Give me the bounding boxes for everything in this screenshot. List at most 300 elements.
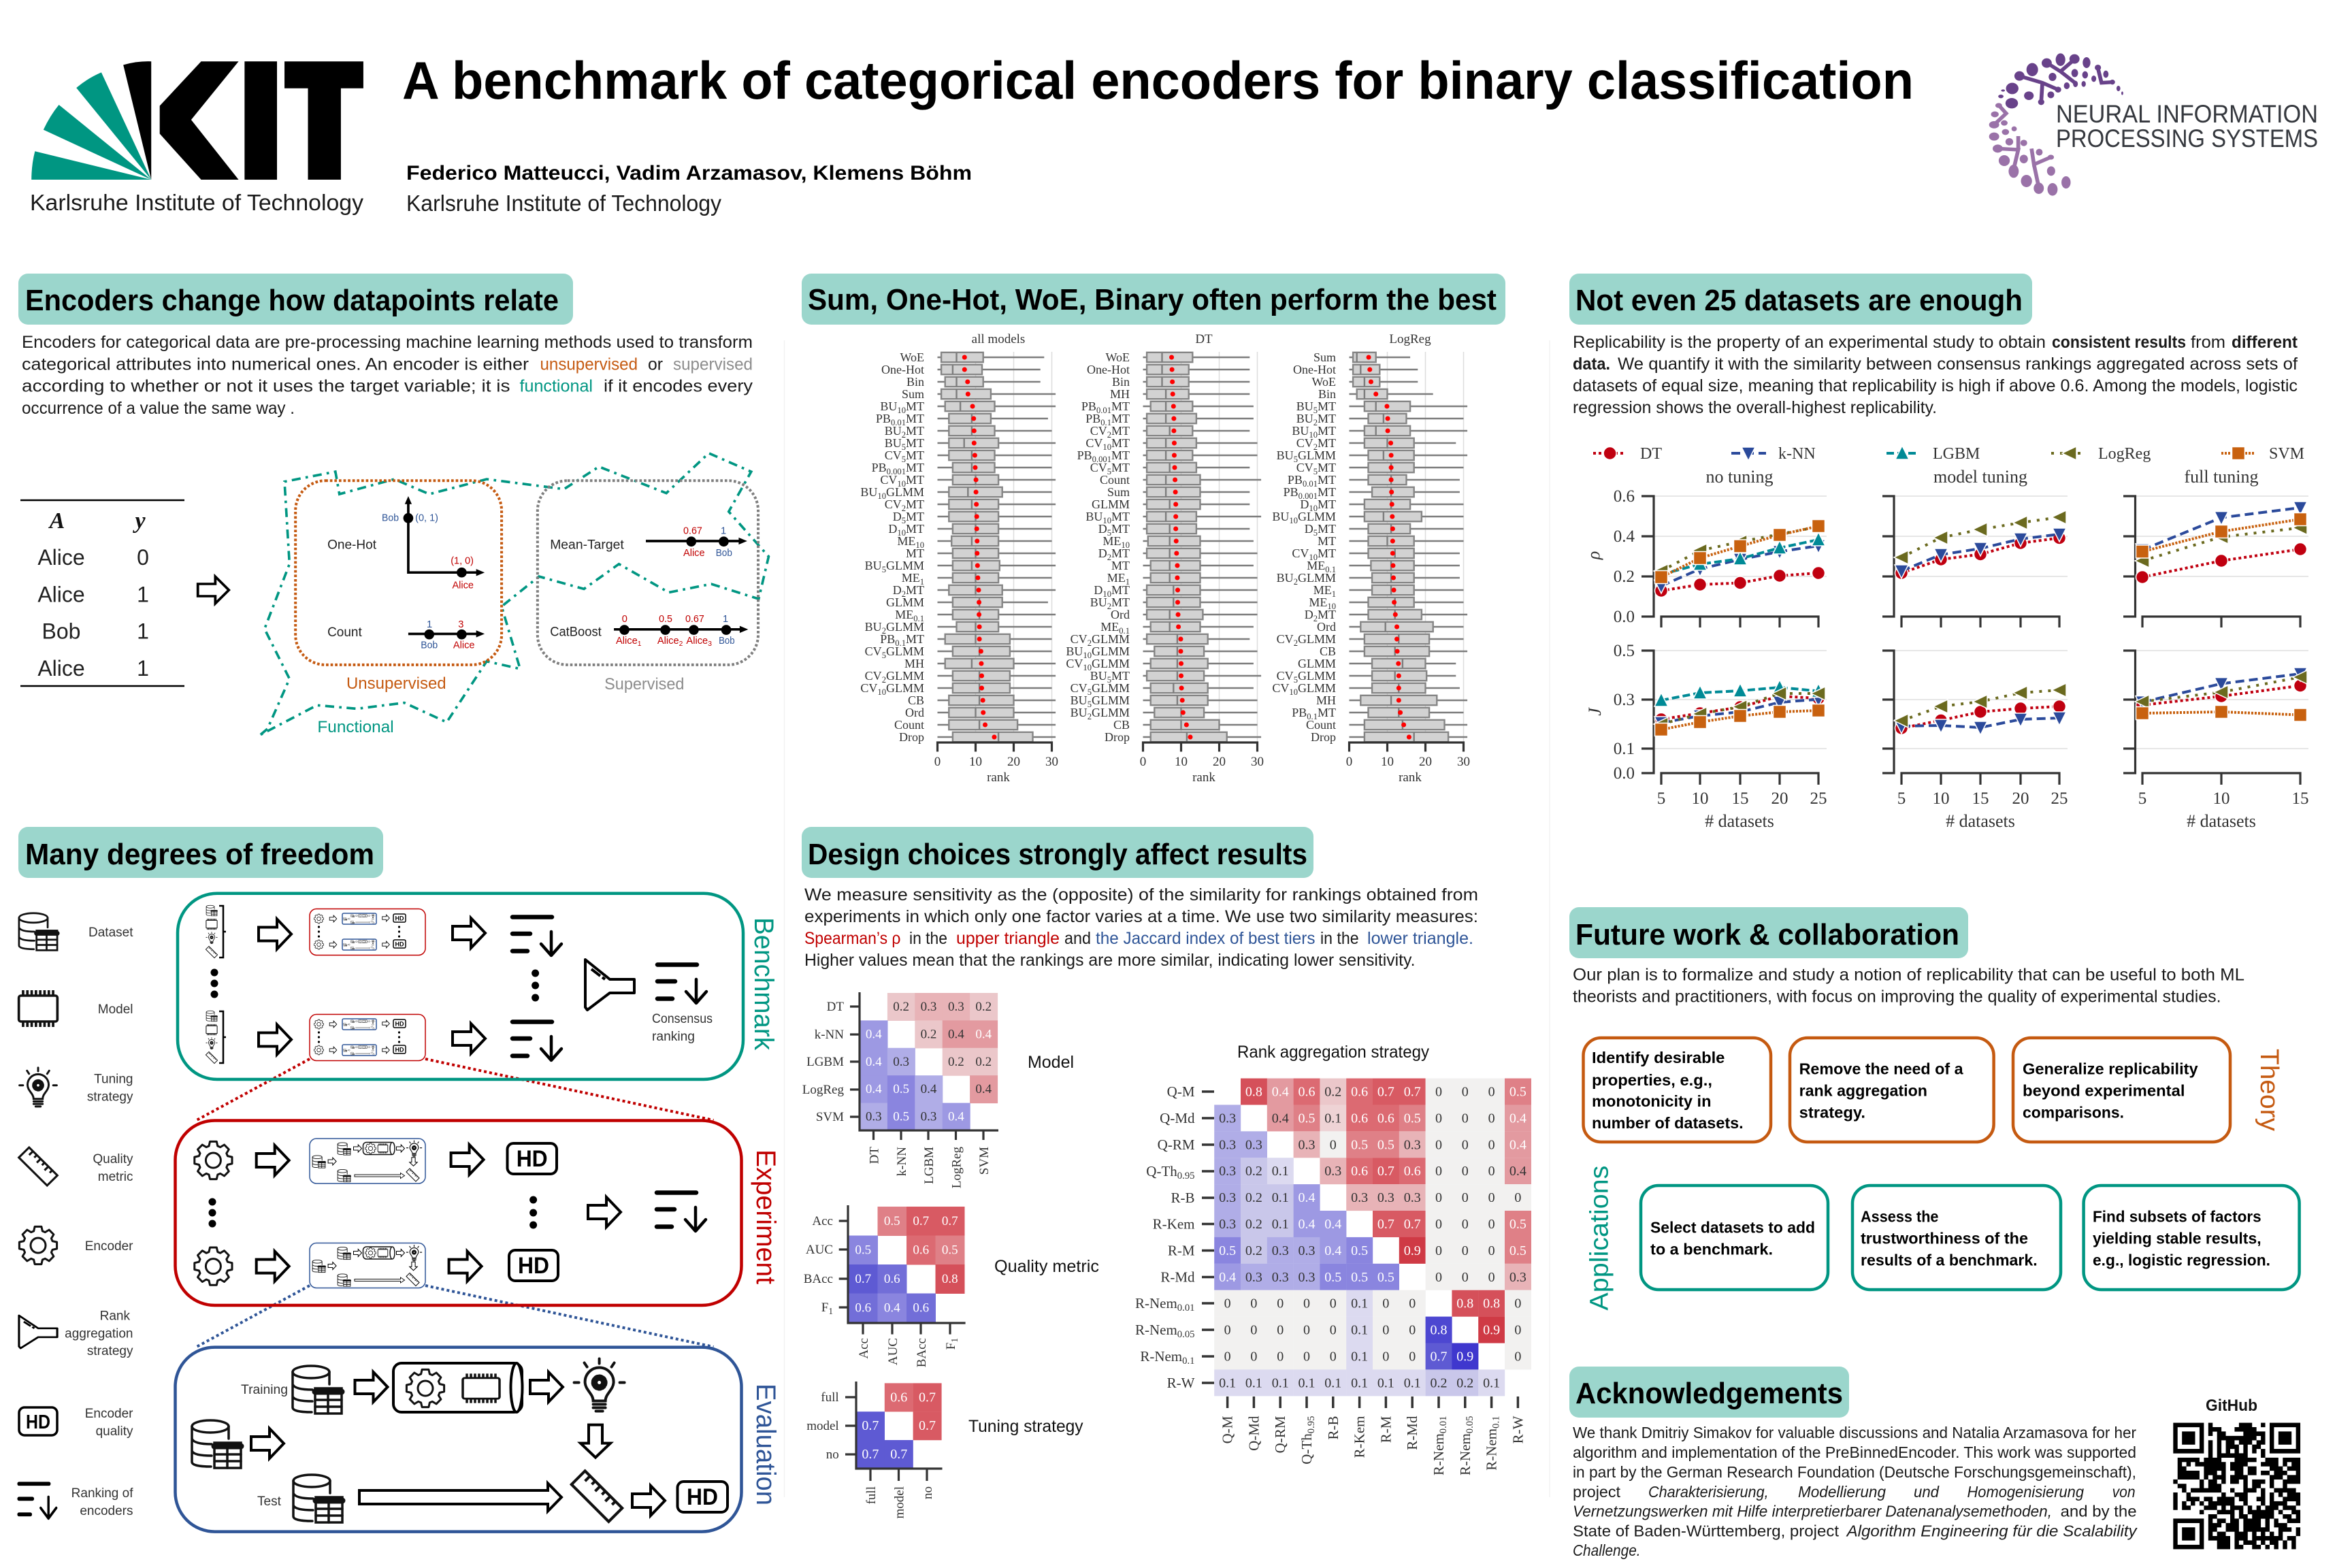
panel: evaluation	[176, 1348, 781, 1532]
line chart: model tuning, J	[1882, 651, 2068, 831]
box plot: LogReg: Ord	[1317, 620, 1336, 634]
box plot: DT: DT	[1195, 332, 1213, 346]
box plot: LogReg: Count	[1306, 718, 1336, 732]
legend: factors: metric	[98, 1170, 133, 1184]
heatmap: rank aggregation strategy: 0.3	[1298, 1243, 1315, 1258]
heatmap: rank aggregation strategy: 0	[1514, 1349, 1521, 1364]
heatmap: rank aggregation strategy: R-Nem0.1	[1140, 1348, 1195, 1367]
table: example data: Bob	[42, 619, 80, 644]
callout: stable subsets: yielding stable results,	[2093, 1230, 2261, 1247]
box plot: DT: BU5MT	[1090, 669, 1130, 685]
icon: quality metric	[19, 1147, 57, 1186]
callout: generalize replicability	[2013, 1038, 2230, 1142]
callout: trustworthiness: trustworthiness of the	[1861, 1230, 2028, 1247]
text block: acknowledgements: algorithm and implementation of the PreBinnedEncoder. This work was supported	[1573, 1443, 2136, 1461]
box plot: all models: ME0.1	[895, 608, 924, 623]
label: supervised: Supervised	[604, 675, 684, 693]
heatmap: quality metric: 0.6	[855, 1301, 871, 1315]
heatmap: rank aggregation strategy: 0	[1488, 1111, 1495, 1126]
heatmap: rank aggregation strategy: 0.5	[1377, 1137, 1394, 1152]
box plot: all models: PB0.01MT	[876, 412, 924, 427]
heatmap: rank aggregation strategy: 0.3	[1272, 1243, 1289, 1258]
arrows: to rankings	[453, 918, 485, 1054]
text block: acknowledgements	[1573, 1424, 2138, 1559]
box plot: DT: One-Hot	[1087, 363, 1130, 376]
box plot: LogReg: BU10GLMM	[1272, 510, 1336, 525]
text block: acknowledgements: and by the	[2061, 1503, 2137, 1520]
heatmap: rank aggregation strategy: 0	[1250, 1323, 1257, 1338]
icon: pipeline	[393, 1363, 523, 1412]
heatmap: rank aggregation strategy: Q-Th0.95	[1146, 1163, 1195, 1181]
label: benchmark: Benchmark	[749, 917, 779, 1051]
line chart: no tuning, rho: 0.0	[1614, 608, 1635, 626]
box plot: all models: 20	[1007, 755, 1020, 769]
heatmap: rank aggregation strategy: Q-RM	[1158, 1137, 1195, 1153]
affiliation: Karlsruhe Institute of Technology	[406, 191, 721, 216]
box plot: DT: MH	[1110, 387, 1130, 401]
heatmap: rank aggregation strategy: 0	[1277, 1296, 1284, 1311]
icon: consensus ranking	[657, 965, 706, 1003]
icons: rankings	[512, 917, 561, 1060]
heatmap: rank aggregation strategy: 0	[1462, 1270, 1469, 1285]
table: example data: 1	[137, 583, 149, 607]
box plot: LogReg: D5MT	[1305, 522, 1336, 538]
text block: replicability: Replicability is the property of an experimental study to obtain	[1573, 333, 2046, 352]
logo: KIT	[30, 61, 364, 215]
heatmap: rank aggregation strategy: 0.2	[1324, 1085, 1341, 1100]
connector: experiment to evaluation	[195, 1286, 713, 1348]
box plot: DT: WoE	[1105, 350, 1130, 364]
heatmap: quality metric: Acc	[857, 1338, 871, 1359]
heatmap: model: 0.5	[893, 1110, 909, 1124]
box plot: LogReg: D10MT	[1300, 497, 1336, 513]
box plot: DT: BU2GLMM	[1071, 706, 1130, 721]
heatmap: tuning strategy: 0.6	[890, 1390, 907, 1405]
callout: rank aggregation: Remove the need of a	[1799, 1060, 1963, 1078]
heatmap: model: SVM	[816, 1110, 844, 1124]
text block: encoders intro: unsupervised	[540, 355, 638, 374]
box plot: DT	[1066, 332, 1264, 785]
box plot: LogReg: 10	[1381, 755, 1394, 769]
text block: encoders intro: supervised	[673, 355, 753, 374]
encoder: one-hot: (0, 1)	[415, 513, 438, 524]
line chart: no tuning, J: 25	[1810, 789, 1827, 808]
box plot: LogReg: WoE	[1311, 375, 1336, 389]
panel: design choices	[802, 827, 1531, 1519]
heatmap: rank aggregation strategy: 0	[1435, 1190, 1442, 1205]
box plot: all models: Count	[894, 718, 924, 732]
text block: sensitivity: Spearman’s ρ	[804, 929, 901, 948]
box plot: DT: D2MT	[1098, 546, 1130, 562]
heatmap: rank aggregation strategy: 0	[1303, 1349, 1310, 1364]
box plot: all models: CV10GLMM	[860, 681, 924, 697]
heatmap: rank aggregation strategy: 0.1	[1298, 1375, 1315, 1390]
label: rank aggregation strategy: Rank aggregation strategy	[1237, 1043, 1429, 1062]
legend: models: k-NN	[1778, 445, 1816, 463]
boundary: unsupervised	[295, 480, 502, 665]
text block: acknowledgements: project	[1573, 1483, 1621, 1501]
encoder: catboost: Alice3	[686, 636, 712, 648]
icon: rank aggregation strategy	[19, 1316, 57, 1348]
heatmap: rank aggregation strategy: 0.9	[1483, 1323, 1500, 1338]
box plot: DT: Drop	[1105, 730, 1130, 744]
text block: encoders intro	[22, 333, 753, 418]
heatmap: rank aggregation strategy: 0	[1382, 1323, 1389, 1338]
encoder: mean-target: Alice	[683, 548, 705, 559]
heatmap: rank aggregation strategy: 0.4	[1509, 1164, 1526, 1179]
panel: experiment	[176, 1120, 781, 1305]
box plot: DT: rank	[1192, 770, 1215, 785]
legend: factors: Tuning	[94, 1073, 133, 1086]
box plot: LogReg: 20	[1419, 755, 1432, 769]
mini experiment 1	[310, 909, 425, 956]
connector: benchmark to experiment	[195, 1059, 713, 1121]
heatmap: rank aggregation strategy: R-Md	[1404, 1416, 1420, 1450]
heading: encoders	[18, 274, 573, 325]
encoder: mean-target: 1	[721, 526, 726, 537]
logo: KIT: Karlsruhe Institute of Technology	[30, 190, 364, 215]
icon: encoder quality 2: HD	[518, 1253, 549, 1279]
box plot: DT: CV10GLMM	[1066, 657, 1130, 672]
table: example data: Alice	[37, 545, 85, 570]
heatmap: rank aggregation strategy: 0.5	[1509, 1085, 1526, 1100]
heading: design choices: Design choices strongly affect results	[808, 838, 1307, 871]
heatmap: tuning strategy: full	[864, 1486, 879, 1504]
line chart: model tuning, J: 20	[2012, 789, 2029, 808]
text block: replicability: data.	[1573, 355, 1610, 374]
box plot: DT: PB0.001MT	[1077, 448, 1130, 464]
label: theory: Theory	[2255, 1049, 2283, 1131]
label: applications: Applications	[1586, 1166, 1614, 1311]
box plot: DT: ME1	[1107, 571, 1130, 587]
text block: encoders intro: functional	[520, 377, 593, 396]
mini evaluation 1	[310, 1139, 425, 1183]
legend: models	[1593, 445, 2304, 463]
heatmap: rank aggregation strategy: 0	[1250, 1296, 1257, 1311]
box plot: LogReg: Bin	[1318, 387, 1336, 401]
heatmap: rank aggregation strategy: 0.5	[1351, 1243, 1368, 1258]
icon: ranking of encoders	[19, 1484, 56, 1518]
panel: encoders	[18, 274, 768, 736]
heatmap: rank aggregation strategy: 0.5	[1219, 1243, 1236, 1258]
heatmap: rank aggregation strategy: 0.1	[1272, 1190, 1289, 1205]
text block: acknowledgements: Algorithm Engineering für die Scalability	[1846, 1522, 2138, 1540]
text block: replicability: regression shows the overall-highest replicability.	[1573, 398, 1937, 417]
heatmap: rank aggregation strategy: 0.6	[1404, 1164, 1421, 1179]
box plot: all models: 0	[934, 755, 941, 769]
box plot: DT: PB0.1MT	[1085, 412, 1130, 427]
heatmap: rank aggregation strategy: 0	[1462, 1111, 1469, 1126]
heading: best encoders: Sum, One-Hot, WoE, Binary often perform the best	[808, 283, 1497, 316]
heatmap: rank aggregation strategy: 0.1	[1324, 1111, 1341, 1126]
heatmap: rank aggregation strategy: 0.3	[1377, 1190, 1394, 1205]
heatmap: rank aggregation strategy: 0	[1462, 1190, 1469, 1205]
box plot: all models: PB0.001MT	[872, 461, 924, 476]
box plot: LogReg: PB0.01MT	[1288, 473, 1336, 489]
line chart: no tuning, J: 0.0	[1614, 764, 1635, 783]
heatmap: rank aggregation strategy: 0	[1488, 1243, 1495, 1258]
heatmap: rank aggregation strategy: 0	[1488, 1217, 1495, 1232]
label: quality metric: Quality metric	[994, 1257, 1099, 1276]
box plot: LogReg: 30	[1457, 755, 1470, 769]
text block: encoders intro: according to whether or not it uses the target variable; it is	[22, 377, 510, 396]
heading: encoders: Encoders change how datapoints relate	[25, 284, 559, 317]
text block: plan	[1573, 965, 2244, 1006]
heatmap: rank aggregation strategy: 0.5	[1351, 1270, 1368, 1285]
heatmap: rank aggregation strategy: 0.1	[1272, 1375, 1289, 1390]
heading: degrees of freedom: Many degrees of freedom	[25, 838, 374, 871]
box plot: DT: 20	[1213, 755, 1226, 769]
legend: factors: Encoder	[85, 1239, 133, 1254]
text block: sensitivity	[804, 885, 1478, 970]
heatmap: rank aggregation strategy: 0	[1330, 1137, 1337, 1152]
heatmap: rank aggregation strategy: 0	[1224, 1296, 1231, 1311]
heatmap: rank aggregation strategy: 0.1	[1351, 1296, 1368, 1311]
box plot: LogReg: ME1	[1313, 583, 1336, 599]
box plot: DT: CB	[1113, 718, 1130, 732]
icon: test set	[293, 1475, 342, 1522]
line chart: full tuning, rho: full tuning	[2184, 467, 2259, 487]
boundary: functional	[261, 453, 768, 735]
heading: acknowledgements	[1569, 1367, 1849, 1418]
heatmap: rank aggregation strategy: 0	[1488, 1085, 1495, 1100]
heatmap: rank aggregation strategy: 0.8	[1456, 1296, 1473, 1311]
heatmap: rank aggregation strategy: 0	[1382, 1296, 1389, 1311]
mini experiment 1: HD	[395, 941, 404, 947]
line chart: model tuning, J: 25	[2051, 789, 2068, 808]
legend: factors: strategy	[87, 1344, 133, 1358]
callout: desirable properties	[1583, 1038, 1771, 1142]
box plot: all models: MH	[904, 657, 924, 670]
table: example data: 1	[137, 656, 149, 681]
encoder: catboost: 0.67	[685, 614, 704, 625]
heatmap: rank aggregation strategy: 0	[1462, 1164, 1469, 1179]
heatmap: rank aggregation strategy: 0.2	[1245, 1190, 1262, 1205]
legend: models: LogReg	[2098, 445, 2151, 463]
encoder: one-hot: Alice	[452, 581, 474, 591]
table: example data: 1	[137, 619, 149, 644]
line chart: no tuning, J: 10	[1692, 789, 1708, 808]
heatmap: rank aggregation strategy: 0.4	[1509, 1111, 1526, 1126]
box plot: DT: CV5GLMM	[1071, 681, 1130, 697]
callout: stable subsets: e.g., logistic regression.	[2093, 1252, 2270, 1269]
box plot: LogReg: GLMM	[1298, 657, 1336, 670]
icon: training set	[293, 1366, 342, 1414]
heatmap: model: 0.4	[866, 1027, 882, 1041]
heatmap: rank aggregation strategy: 0	[1462, 1085, 1469, 1100]
box plot: LogReg: Drop	[1311, 730, 1336, 744]
icon: encoder quality	[678, 1482, 728, 1512]
text block: encoders intro: categorical attributes into numerical ones. An encoder is either	[22, 355, 529, 374]
text block: acknowledgements: We thank Dmitriy Simakov for valuable discussions and Natalia Arzamasova for her	[1573, 1424, 2136, 1441]
text block: plan: theorists and practitioners, with focus on improving the quality of experimental studies.	[1573, 987, 2221, 1006]
heatmap: rank aggregation strategy: 0.4	[1272, 1111, 1289, 1126]
box plot: all models: BU5MT	[885, 436, 924, 452]
box plot: all models: WoE	[900, 350, 924, 364]
box plot: DT: BU2MT	[1090, 595, 1130, 611]
line chart: model tuning, rho: model tuning	[1933, 467, 2027, 487]
panel: replicability	[1569, 274, 2308, 831]
text block: acknowledgements: von	[2112, 1483, 2136, 1501]
heatmap: rank aggregation strategy: 0.8	[1245, 1085, 1262, 1100]
legend: factors: Encoder	[85, 1407, 133, 1421]
heatmap: rank aggregation strategy: Q-M	[1220, 1416, 1236, 1443]
box plot: all models: D5MT	[893, 510, 924, 525]
heatmap: tuning strategy: 0.7	[919, 1418, 936, 1433]
label: consensus ranking: ranking	[652, 1030, 695, 1044]
heatmap: rank aggregation strategy: R-B	[1171, 1190, 1195, 1206]
box plot: all models: Bin	[906, 375, 924, 389]
heatmap: rank aggregation strategy: Q-Md	[1160, 1110, 1195, 1126]
box plot: DT: BU5GLMM	[1071, 693, 1130, 709]
logo: NeurIPS	[1989, 53, 2318, 196]
legend: models: LGBM	[1933, 445, 1980, 463]
line chart: no tuning, rho	[1584, 467, 1827, 627]
table: example data: 0	[137, 545, 149, 570]
text block: sensitivity: in the	[1320, 929, 1359, 948]
heatmap: quality metric: Acc	[812, 1214, 833, 1228]
label: unsupervised: Unsupervised	[346, 674, 446, 693]
heatmap: rank aggregation strategy: R-Nem0.05	[1457, 1416, 1475, 1475]
text block: encoders intro: occurrence of a value the same way .	[22, 399, 295, 418]
arrows: to quality	[449, 1145, 484, 1281]
box plot: DT: Ord	[1111, 608, 1130, 621]
heading: design choices	[802, 827, 1313, 878]
dots	[529, 1196, 537, 1229]
encoder: one-hot: (1, 0)	[451, 556, 474, 567]
line chart: no tuning, J: # datasets	[1705, 811, 1774, 831]
icon: encoder quality 1	[508, 1143, 557, 1174]
encoder: mean-target	[550, 526, 747, 559]
diagram: encoder taxonomy	[261, 453, 768, 736]
label: experiment: Experiment	[751, 1149, 781, 1284]
box plot: LogReg: CB	[1320, 644, 1336, 658]
heatmap: rank aggregation strategy: 0.1	[1219, 1375, 1236, 1390]
heatmap: model: 0.3	[921, 1110, 936, 1124]
box plot: LogReg: D2MT	[1305, 608, 1336, 623]
encoder: mean-target: 0.67	[683, 526, 702, 537]
title: A benchmark of categorical encoders for binary classification	[402, 50, 1914, 110]
box plot: all models: rank	[987, 770, 1010, 785]
box plot: DT: D5MT	[1098, 522, 1130, 538]
encoder: count: Alice	[453, 640, 474, 651]
callout: desirable properties: monotonicity in	[1592, 1092, 1711, 1110]
callout: generalize replicability: comparisons.	[2023, 1104, 2124, 1122]
heatmap: rank aggregation strategy	[1135, 1078, 1531, 1475]
heatmap: rank aggregation strategy: 0.1	[1351, 1349, 1368, 1364]
heatmap: model: 0.3	[866, 1110, 882, 1124]
encoder: count: 3	[458, 619, 463, 630]
arrows: to evaluations	[257, 1145, 289, 1281]
heatmap: rank aggregation strategy: 0.3	[1219, 1164, 1236, 1179]
heatmap: rank aggregation strategy: R-Md	[1160, 1269, 1195, 1285]
box plot: LogReg: CV5MT	[1296, 461, 1336, 476]
legend: factors: Quality	[93, 1152, 133, 1166]
heatmap: rank aggregation strategy: 0.6	[1377, 1111, 1394, 1126]
heading: best encoders	[802, 274, 1505, 325]
box plot: LogReg	[1272, 332, 1470, 785]
line chart: full tuning, J: # datasets	[2187, 811, 2256, 831]
icon: ranking	[657, 1192, 706, 1231]
heading: replicability: Not even 25 datasets are enough	[1575, 284, 2023, 317]
line chart: no tuning, J: 0.5	[1614, 642, 1635, 660]
encoder: catboost: CatBoost	[550, 624, 602, 639]
line chart: no tuning, J	[1585, 642, 1827, 831]
box plot: DT: 0	[1140, 755, 1146, 769]
heatmap: rank aggregation strategy: 0	[1409, 1323, 1416, 1338]
heatmap: rank aggregation strategy: 0.3	[1245, 1137, 1262, 1152]
heatmap: rank aggregation strategy: 0.4	[1298, 1217, 1315, 1232]
text block: acknowledgements: Vernetzungswerken mit Hilfe interpretierbarer Datenanalysemethoden,	[1573, 1503, 2052, 1520]
heatmap: model: 0.4	[866, 1055, 882, 1069]
legend: factors: quality	[96, 1424, 133, 1439]
text block: acknowledgements: Charakterisierung,	[1648, 1483, 1769, 1501]
label: consensus ranking: Consensus	[652, 1012, 713, 1026]
box plot: LogReg: MH	[1316, 693, 1336, 707]
heatmap: rank aggregation strategy: 0.4	[1509, 1137, 1526, 1152]
heatmap: rank aggregation strategy: 0.5	[1509, 1243, 1526, 1258]
heatmap: rank aggregation strategy: 0.7	[1430, 1349, 1447, 1364]
text block: replicability: different	[2232, 333, 2298, 352]
heatmap: rank aggregation strategy: 0	[1435, 1085, 1442, 1100]
heatmap: rank aggregation strategy: 0	[1488, 1164, 1495, 1179]
line chart: full tuning, J: 15	[2292, 789, 2308, 808]
heatmap: tuning strategy: 0.7	[862, 1447, 879, 1462]
heatmap: quality metric: BAcc	[915, 1338, 929, 1367]
heatmap: model: 0.3	[893, 1055, 909, 1069]
line chart: no tuning, J: 5	[1657, 789, 1665, 808]
heatmap: rank aggregation strategy: R-B	[1325, 1416, 1341, 1440]
callout: rank aggregation: strategy.	[1799, 1104, 1865, 1122]
heatmap: rank aggregation strategy: 0.7	[1404, 1217, 1421, 1232]
panel: best encoders	[802, 274, 1505, 785]
callout: stable subsets	[2084, 1186, 2300, 1290]
callout: desirable properties: number of datasets.	[1592, 1114, 1744, 1132]
box plot: DT: CV10MT	[1085, 436, 1130, 452]
encoder: count	[327, 619, 485, 651]
heatmap: rank aggregation strategy: 0.5	[1351, 1137, 1368, 1152]
box plot: all models: Drop	[899, 730, 924, 744]
heatmap: rank aggregation strategy: R-Nem0.1	[1484, 1416, 1502, 1471]
box plot: all models: CV5GLMM	[865, 644, 924, 660]
box plot: DT: D10MT	[1094, 583, 1130, 599]
box plot: LogReg: BU2GLMM	[1277, 571, 1336, 587]
heatmap: tuning strategy: 0.7	[919, 1390, 936, 1405]
box plot: all models: D10MT	[888, 522, 924, 538]
box plot: all models: CV2MT	[885, 497, 924, 513]
callout: select datasets: Select datasets to add	[1650, 1218, 1815, 1236]
heatmap: rank aggregation strategy: 0.2	[1430, 1375, 1447, 1390]
icon: encoder quality 1: HD	[517, 1146, 548, 1172]
heatmap: model: k-NN	[895, 1147, 909, 1176]
heatmap: quality metric: BAcc	[804, 1272, 833, 1286]
heading: future work	[1569, 907, 1968, 958]
heatmap: rank aggregation strategy: 0.7	[1404, 1085, 1421, 1100]
box plot: all models: One-Hot	[881, 363, 924, 376]
line chart: model tuning, J: 10	[1933, 789, 1949, 808]
text block: replicability	[1573, 333, 2298, 417]
mini experiment 2: HD	[395, 1021, 404, 1028]
line chart: full tuning, J	[2123, 651, 2308, 831]
box plot: DT: 10	[1175, 755, 1188, 769]
heatmap: rank aggregation strategy: 0.2	[1245, 1217, 1262, 1232]
heatmap: tuning strategy: no	[921, 1486, 935, 1499]
text block: sensitivity: upper triangle	[956, 929, 1060, 948]
box plot: all models: CV2GLMM	[865, 669, 924, 685]
encoder: catboost: 1	[723, 614, 728, 625]
heatmap: model: LGBM	[922, 1147, 936, 1184]
box plot: LogReg: PB0.001MT	[1284, 485, 1336, 501]
